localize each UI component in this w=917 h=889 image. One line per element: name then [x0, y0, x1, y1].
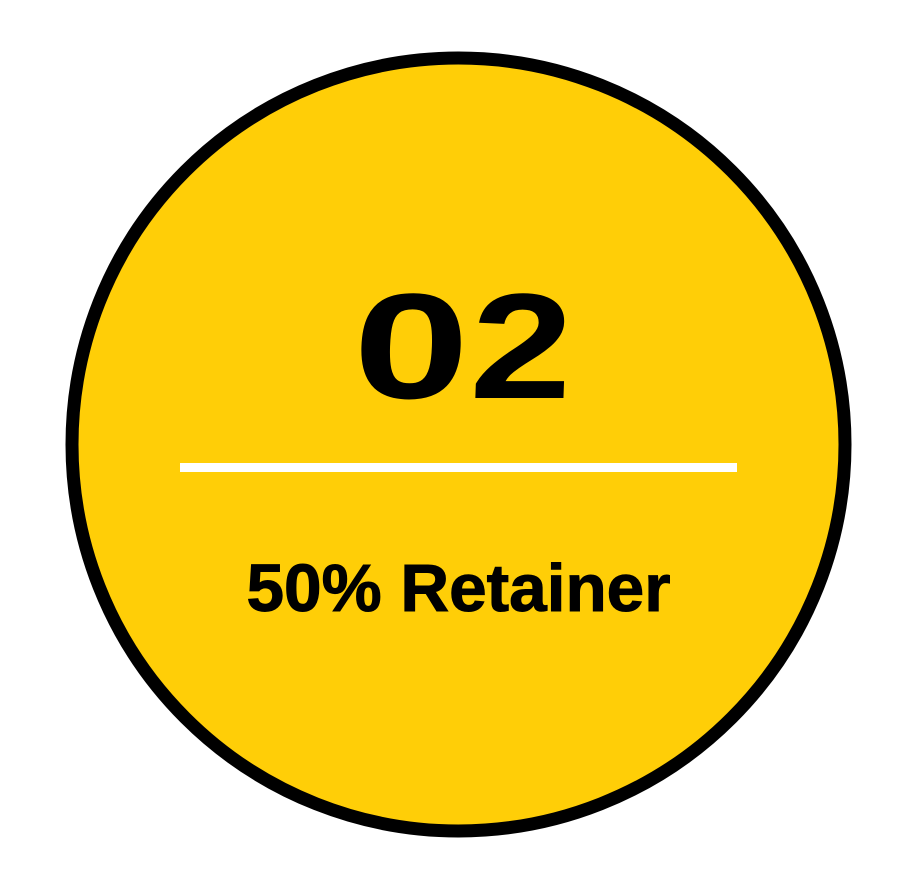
number 02: 0 [350, 263, 472, 430]
white divider [180, 463, 737, 472]
yellow circle with black ring [72, 58, 845, 831]
number 02 [350, 263, 575, 430]
label: 50% Retainer: 50% Retainer [246, 551, 670, 626]
number 02: 2 [468, 264, 575, 430]
